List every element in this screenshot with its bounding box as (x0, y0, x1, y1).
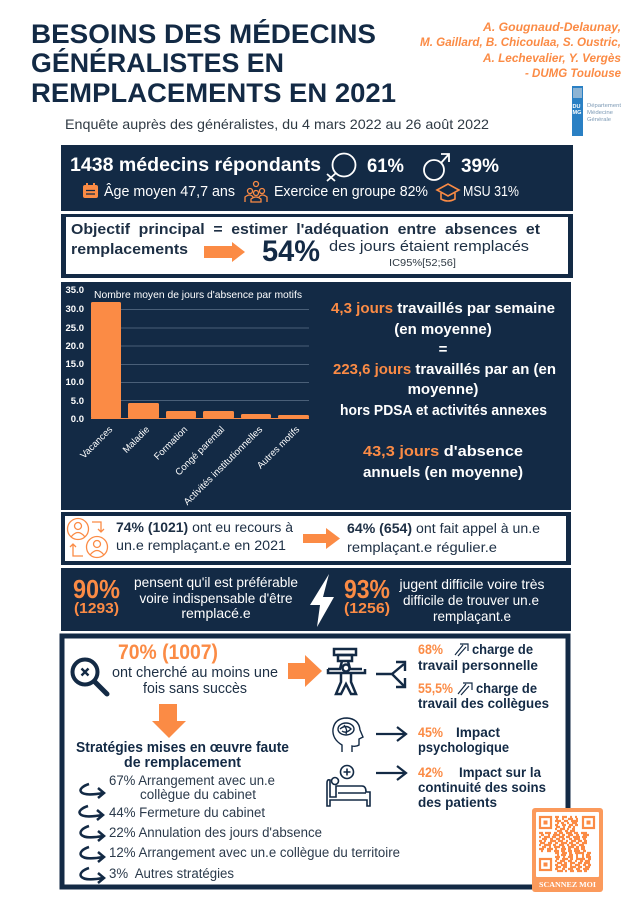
authors (420, 22, 622, 80)
stat 90% text: pensent qu'il est préférable (134, 574, 298, 590)
strategies heading: Stratégies mises en œuvre faute (76, 739, 289, 756)
arrow: continuity (376, 766, 406, 780)
icon: patient in bed (327, 766, 370, 806)
absence key figures: 4,3 jours travaillés par semaine (331, 300, 555, 317)
authors: - DUMG Toulouse (525, 68, 622, 80)
x axis labels: Activités institutionnelles (182, 424, 265, 508)
absence key figures (331, 300, 556, 481)
absence key figures: 43,3 jours d'absence (363, 443, 523, 460)
authors: A. Gougnaud-Delaunay, (482, 22, 621, 34)
workload text: travail personnelle (418, 658, 538, 673)
stat 93% text: jugent difficile voire très (399, 576, 544, 592)
icons: up arrows (455, 644, 472, 695)
bar chart: absence days by reason (66, 285, 309, 508)
stat 90% text (134, 574, 298, 621)
strategies list: 22% Annulation des jours d'absence (109, 825, 322, 840)
absence key figures: 223,6 jours travaillés par an (en (333, 361, 556, 378)
x axis labels: Maladie (121, 424, 152, 456)
stat 70% text: ont cherché au moins une (112, 664, 278, 681)
y axis labels: 30.0 (66, 304, 84, 315)
title: BESOINS DES MÉDECINS (31, 18, 376, 49)
icon: group of people (245, 182, 267, 202)
arrow (204, 242, 245, 262)
strategies list: 3% Autres stratégies (109, 866, 234, 881)
panel: difficulté (61, 568, 571, 631)
continuity of care text: continuité des soins (418, 780, 546, 795)
stat 93% text (399, 576, 544, 624)
absence key figures: annuels (en moyenne) (363, 464, 523, 481)
QR code (532, 808, 603, 892)
panel: objectif principal (61, 214, 573, 278)
icon: exchange of people (68, 518, 108, 558)
logo: département de médecine générale (572, 86, 622, 136)
panel: recherche sans succès (62, 636, 568, 887)
replaced days label: des jours étaient remplacés (329, 238, 529, 255)
x axis labels (78, 424, 302, 508)
strategies list: 67% Arrangement avec un.e (109, 773, 275, 788)
regular replacement text (347, 521, 540, 555)
stat 93%: (1256) (344, 600, 390, 617)
continuity of care text: Impact sur la (459, 765, 541, 780)
average age: Âge moyen 47,7 ans (104, 183, 235, 200)
stat 90%: 90% (73, 574, 120, 604)
MSU share: MSU 31% (463, 183, 519, 200)
absence key figures: (en moyenne) (394, 321, 492, 338)
bars (91, 302, 309, 418)
icon: magnifier (72, 660, 107, 694)
arrow: fork (376, 662, 405, 687)
absence key figures: moyenne) (408, 381, 478, 398)
subtitle: Enquête auprès des généralistes, du 4 mars 2022 au 26 août 2022 (65, 116, 489, 132)
workload text: 55,5% (418, 681, 453, 696)
x axis labels: Congé parental (173, 424, 227, 478)
arrow right (288, 655, 322, 687)
heading: médecins répondants: 1438 médecins répondants (70, 155, 321, 176)
stat 93%: 93% (344, 574, 390, 604)
stat 93% text: remplaçant.e (433, 608, 511, 624)
logo: département de médecine générale: MG (572, 110, 581, 116)
psychological impact text: psychologique (418, 740, 509, 755)
male share: 39% (461, 156, 499, 177)
stat 93% text: difficile de trouver un.e (403, 592, 539, 608)
stat 90% text: voire indispensable d'être (140, 590, 293, 606)
absence key figures: hors PDSA et activités annexes (340, 402, 547, 419)
continuity of care text (418, 765, 546, 810)
icon: person carrying workload (328, 649, 365, 694)
key figure 54%: 54% (262, 235, 320, 268)
panel: absences (61, 282, 571, 510)
y axis labels (66, 285, 84, 425)
authors: M. Gaillard, B. Chicoulaa, S. Oustric, (420, 37, 621, 49)
absence key figures: = (439, 341, 448, 358)
y axis labels: 15.0 (66, 359, 84, 370)
stat 70% text: fois sans succès (143, 680, 247, 697)
strategies list: 44% Fermeture du cabinet (109, 805, 265, 820)
logo: département de médecine générale: DU (572, 104, 580, 110)
objective text (71, 221, 540, 258)
arrow down (152, 704, 186, 738)
panel: répondants (61, 145, 573, 211)
y axis labels: 10.0 (66, 377, 84, 388)
strategies list: collègue du cabinet (140, 787, 256, 802)
workload text: charge de (472, 642, 533, 657)
y axis labels: 0.0 (71, 414, 84, 425)
x axis labels: Autres motifs (255, 424, 302, 471)
psychological impact text: 45% (418, 725, 443, 740)
stat 90% text: remplacé.e (181, 605, 251, 621)
chart title: Nombre moyen de jours d'absence par motifs (94, 289, 302, 301)
strategies list (109, 773, 400, 881)
stat 70% text (112, 664, 278, 697)
y axis labels: 25.0 (66, 323, 84, 334)
workload text: travail des collègues (418, 696, 549, 711)
strategies heading: de remplacement (124, 754, 241, 771)
psychological impact text: Impact (456, 725, 501, 740)
logo: département de médecine générale: Médecine (587, 110, 613, 116)
title (31, 18, 396, 108)
stat 70%: 70% (1007) (118, 641, 218, 664)
icon: lightning (310, 574, 334, 627)
objective text: Objectif principal = estimer l'adéquation entre absences et (71, 221, 540, 238)
icon: male symbol (424, 154, 449, 180)
icon: head with brain (333, 718, 363, 752)
icons: curved list arrows (80, 784, 104, 883)
icon: graduation cap (437, 184, 459, 201)
workload text: 68% (418, 642, 443, 657)
x axis labels: Vacances (78, 424, 115, 461)
workload text: charge de (476, 681, 537, 696)
recourse text: 74% (1021) ont eu recours à (116, 520, 294, 535)
y axis labels: 5.0 (71, 396, 84, 407)
panel: recours au remplaçant (61, 512, 571, 565)
arrow: psychological (376, 727, 406, 741)
y axis labels: 35.0 (66, 285, 84, 296)
arrow (303, 528, 340, 549)
stat 90%: (1293) (74, 600, 119, 617)
strategies list: 12% Arrangement avec un.e collègue du territoire (109, 845, 400, 860)
y axis labels: 20.0 (66, 341, 84, 352)
stat 93% (344, 574, 390, 617)
objective text: remplacements (71, 241, 188, 258)
continuity of care text: 42% (418, 765, 443, 780)
female share: 61% (367, 156, 404, 177)
logo: département de médecine générale: Département (587, 103, 622, 109)
icon: female symbol (327, 154, 356, 181)
confidence interval: IC95%[52;56] (389, 258, 456, 269)
title: REMPLACEMENTS EN 2021 (31, 78, 396, 108)
scan label: SCANNEZ MOI (539, 880, 596, 889)
recourse text (116, 520, 294, 553)
continuity of care text: des patients (418, 795, 497, 810)
workload text (418, 642, 549, 711)
strategies heading (76, 739, 289, 771)
regular replacement text: remplaçant.e régulier.e (347, 540, 497, 555)
recourse text: un.e remplaçant.e en 2021 (116, 538, 286, 553)
psychological impact text (418, 725, 509, 755)
authors: A. Lechevalier, Y. Vergès (482, 53, 621, 65)
group practice: Exercice en groupe 82% (274, 183, 428, 200)
regular replacement text: 64% (654) ont fait appel à un.e (347, 521, 540, 536)
title: GÉNÉRALISTES EN (31, 47, 284, 78)
x axis labels: Formation (152, 424, 190, 462)
stat 90% (73, 574, 120, 617)
logo: département de médecine générale: Générale (587, 117, 611, 123)
icon: calendar (83, 183, 98, 198)
